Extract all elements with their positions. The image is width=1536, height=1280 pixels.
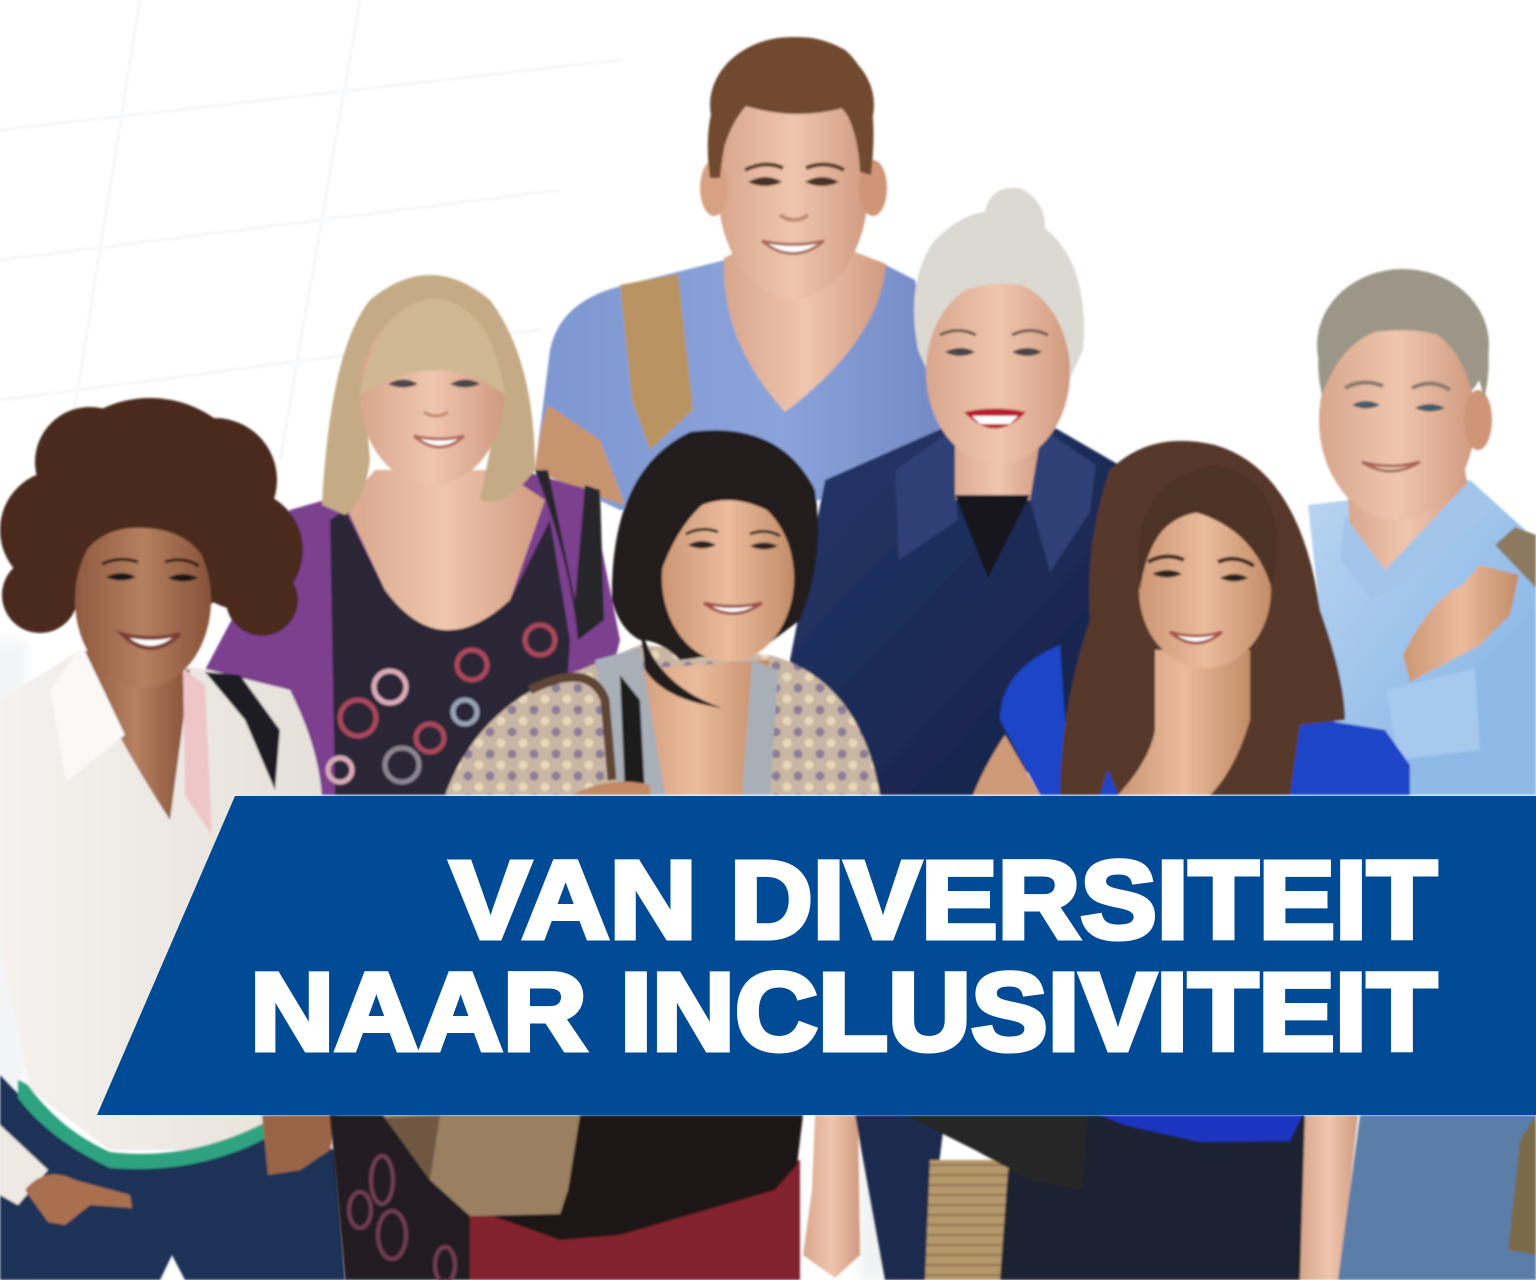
icon: black leather bag xyxy=(905,1115,1088,1190)
icon: brown woven handbag xyxy=(383,1115,580,1216)
person: older man in light-blue shirt xyxy=(1308,269,1536,795)
bare arm right xyxy=(1300,1115,1358,1280)
lower bodies and bags below the banner xyxy=(330,1115,1536,1280)
navy trousers xyxy=(855,1115,945,1280)
black top and red trousers xyxy=(470,1115,803,1280)
dark patterned skirt xyxy=(330,1115,480,1280)
light-blue trousers xyxy=(1338,1115,1536,1280)
title: DIVERSITEIT xyxy=(730,839,1437,962)
person: woman with afro in white shirt xyxy=(0,398,345,1280)
banner: blue slanted band xyxy=(97,796,1536,1115)
person: grey-haired woman in navy jacket xyxy=(790,188,1145,795)
title: VAN xyxy=(450,839,697,962)
bare arm xyxy=(803,1115,860,1278)
title xyxy=(250,839,1437,1074)
title: NAAR xyxy=(250,951,587,1074)
icon: wicker basket xyxy=(925,1160,1010,1280)
person: woman with dark hair in patterned cardigan xyxy=(445,430,880,795)
person: blonde woman in purple cardigan xyxy=(205,275,620,795)
person: tall man in blue t-shirt xyxy=(535,37,945,510)
dark jeans with blue top hem xyxy=(1000,1115,1305,1280)
person: woman with long brown hair in blue top xyxy=(973,441,1410,795)
title: INCLUSIVITEIT xyxy=(620,951,1437,1074)
